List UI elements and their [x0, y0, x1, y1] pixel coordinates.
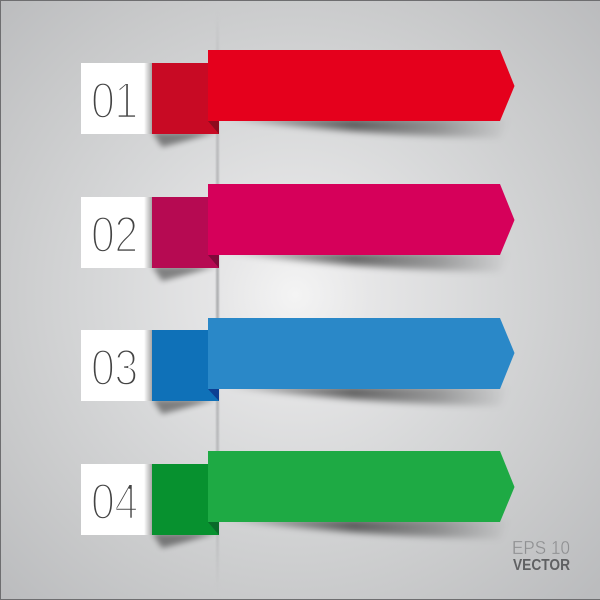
vertical fold line: [216, 12, 219, 592]
back fold: [152, 63, 219, 134]
row 2: pink ribbon: [81, 184, 514, 281]
fold corner: [208, 522, 219, 535]
number tile: 03: [91, 338, 138, 396]
back fold: [152, 464, 219, 535]
number tile: 04: [91, 472, 138, 530]
row 1: red ribbon: [81, 50, 514, 147]
number tile: [81, 197, 152, 268]
number tile: [81, 330, 152, 401]
back fold: [152, 330, 219, 401]
row 3: blue ribbon: [81, 318, 514, 414]
number tile: 02: [91, 205, 138, 263]
arrow banner: [208, 50, 514, 121]
back fold: [152, 197, 219, 268]
row 4: green ribbon: [81, 451, 514, 548]
shadows: [152, 519, 510, 548]
arrow banner: [208, 318, 514, 389]
number tile: [81, 63, 152, 134]
shadows: [152, 252, 510, 281]
fold corner: [208, 255, 219, 268]
arrow banner: [208, 184, 514, 255]
EPS 10 vector badge: VECTOR: [513, 557, 570, 574]
fold corner: [208, 121, 219, 134]
number tile: [81, 464, 152, 535]
shadows: [152, 118, 510, 147]
number tile: 01: [91, 71, 138, 129]
arrow banner: [208, 451, 514, 522]
EPS 10 vector badge: EPS 10: [512, 537, 570, 558]
fold corner: [208, 389, 219, 401]
shadows: [152, 386, 510, 414]
EPS 10 vector badge: [512, 537, 570, 574]
